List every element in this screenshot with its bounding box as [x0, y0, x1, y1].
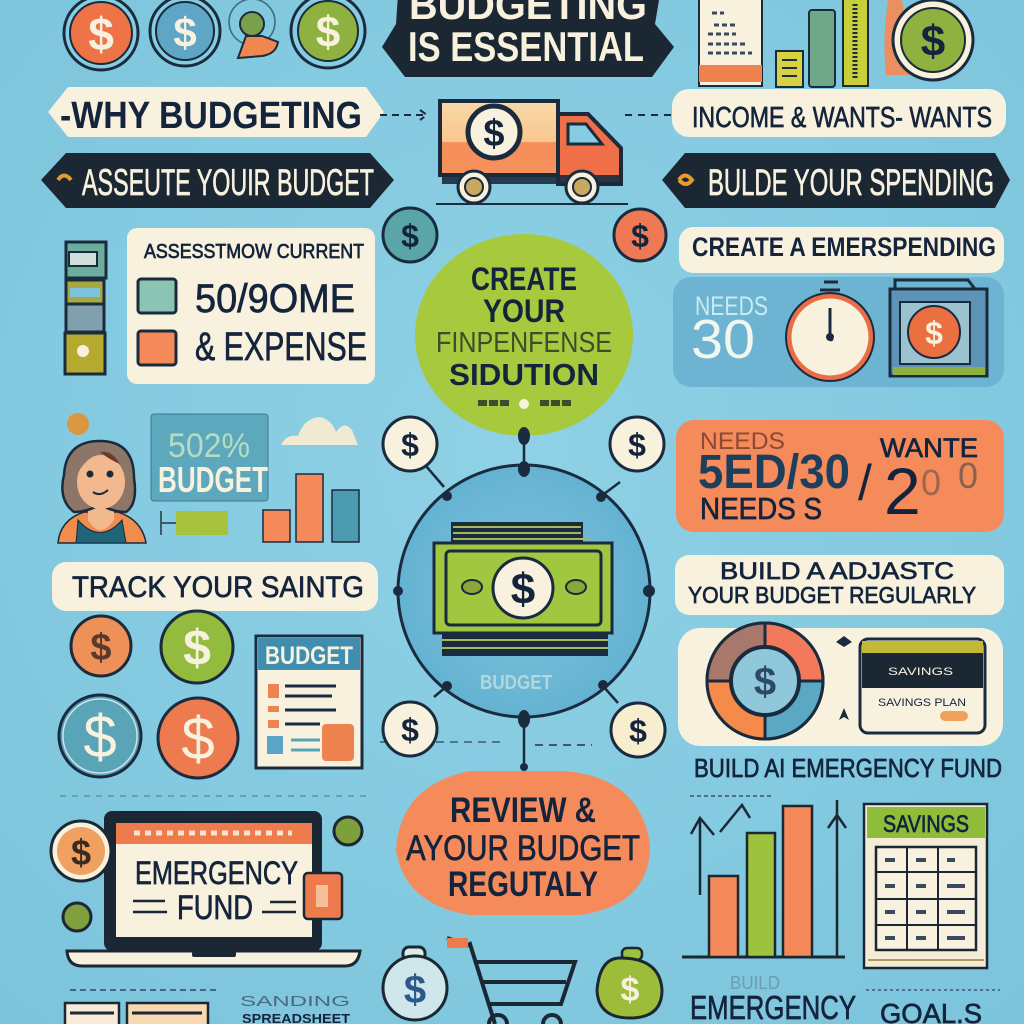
hub: connectors and money stack: BUDGET	[480, 672, 552, 694]
panel: 50/30/20 needs and wants: 5ED/30	[698, 446, 850, 499]
central green circle: CREATE	[471, 261, 577, 297]
pill: track your savings	[52, 562, 378, 611]
icon: cloud	[281, 417, 358, 445]
panel: assess current income and expense: 50/9OME	[195, 277, 355, 321]
bar chart: savings growth	[682, 796, 846, 957]
pill: build and adjust budget: YOUR BUDGET REGULARLY	[688, 582, 976, 608]
title banner	[382, 0, 674, 77]
icon: shopping cart	[447, 938, 575, 1024]
panel: 50/30 budget label: 502%	[168, 427, 250, 465]
pill: create an emergency	[679, 227, 1004, 273]
savings table: SAVINGS	[883, 811, 969, 838]
central green circle: SIDUTION	[449, 357, 599, 392]
coin: orange: $	[631, 218, 649, 254]
coins around hub: $	[628, 427, 646, 463]
pill: track your savings: TRACK YOUR SAINTG	[72, 571, 364, 604]
panel: 50/30/20 needs and wants	[676, 420, 1004, 532]
panel: 50/30/20 needs and wants: 2	[884, 454, 921, 528]
medal coin	[383, 947, 447, 1020]
title banner: IS ESSENTIAL	[408, 23, 644, 70]
panel: assess current income and expense: ASSESSTMOW CURRENT	[144, 241, 364, 263]
coin: teal: $	[401, 218, 419, 254]
top row coins: $	[173, 9, 197, 56]
savings table	[864, 804, 987, 968]
pill: assess your budget: ASSEUTE YOUIR BUDGET	[82, 162, 374, 203]
panel: needs 30, clock and wallet: $	[925, 315, 943, 351]
central green circle: FINPENFENSE	[436, 327, 612, 359]
panel: 50/30/20 needs and wants: WANTE	[880, 433, 978, 463]
money bag	[597, 948, 662, 1018]
laptop: emergency fund: FUND	[177, 889, 253, 927]
icon: stacked ledger	[65, 242, 106, 374]
panel: 50/30/20 needs and wants: 0	[958, 455, 978, 496]
hub: connectors and money stack	[380, 427, 655, 771]
faded build label: BUILD	[730, 973, 780, 993]
review budget blob: AYOUR BUDGET	[406, 829, 640, 868]
panel: donut chart and card: SAVINGS	[888, 666, 953, 678]
coin grid: $	[83, 703, 117, 770]
coins around hub: $	[401, 427, 419, 463]
coin grid	[59, 611, 238, 778]
review budget blob	[396, 771, 650, 915]
pill: income and wants	[672, 89, 1006, 137]
coin grid: $	[181, 705, 215, 772]
money bag: $	[621, 971, 640, 1009]
panel: 50/30/20 needs and wants: 0	[921, 462, 941, 503]
panel: donut chart and card: $	[754, 660, 776, 704]
panel: 50/30 budget label: BUDGET	[158, 459, 268, 500]
dotted rule above goals	[866, 989, 1000, 991]
panel: assess current income and expense: & EXPENSE	[195, 325, 367, 369]
hub: connectors and money stack: $	[511, 565, 535, 614]
laptop: emergency fund	[51, 811, 362, 966]
pill: assess your budget	[41, 153, 394, 208]
top right documents and coin: $	[921, 17, 945, 66]
central green circle: YOUR	[483, 293, 565, 329]
review budget blob: REVIEW &	[450, 791, 596, 830]
laptop: emergency fund: $	[71, 832, 91, 873]
arrow left of truck	[380, 110, 427, 120]
coin: orange	[614, 209, 666, 261]
review budget blob: REGUTALY	[448, 865, 598, 904]
panel: assess current income and expense	[127, 228, 375, 384]
panel: 50/30/20 needs and wants: NEEDS	[700, 428, 785, 455]
pill: build and adjust budget	[675, 555, 1004, 615]
icon: delivery truck with dollar: $	[483, 113, 505, 155]
coins around hub	[383, 417, 665, 757]
top row coins: $	[316, 8, 340, 57]
small legend strip	[161, 511, 228, 535]
panel: 50/30/20 needs and wants: NEEDS S	[700, 491, 822, 526]
coins around hub: $	[629, 713, 647, 749]
panel: donut chart and card	[678, 623, 1003, 746]
panel: 50/30/20 needs and wants: /	[858, 455, 872, 511]
top row coins: $	[88, 8, 114, 60]
coin grid: $	[183, 620, 211, 676]
top right documents and coin	[699, 0, 973, 87]
top row coins	[64, 0, 365, 70]
medal coin: $	[404, 968, 426, 1012]
coins around hub: $	[401, 712, 419, 748]
laptop: emergency fund: EMERGENCY	[135, 855, 298, 891]
person with coin	[58, 413, 146, 543]
bar chart: budget	[263, 474, 359, 542]
panel: donut chart and card: SAVINGS PLAN	[878, 697, 966, 709]
panel: needs 30, clock and wallet: 30	[691, 308, 755, 370]
coin: teal	[383, 208, 437, 262]
panel: needs 30, clock and wallet	[673, 277, 1004, 387]
panel: 50/30 budget label	[151, 414, 268, 501]
coin grid: $	[90, 627, 112, 669]
budget document: BUDGET	[265, 642, 353, 670]
central green circle	[415, 234, 633, 436]
bottom left ledger cards: SANDING	[240, 993, 350, 1010]
arrow right of truck	[625, 114, 672, 116]
pill: build and adjust budget: BUILD A ADJASTC	[720, 558, 954, 585]
budget document	[256, 636, 362, 768]
pill: build your spending	[662, 153, 1010, 208]
icon: delivery truck with dollar	[436, 101, 628, 204]
panel: needs 30, clock and wallet: NEEDS	[695, 291, 768, 321]
bottom left ledger cards	[65, 990, 350, 1024]
pill: why budgeting: -WHY BUDGETING	[60, 95, 362, 137]
faint dotted caption above laptop	[60, 795, 370, 797]
